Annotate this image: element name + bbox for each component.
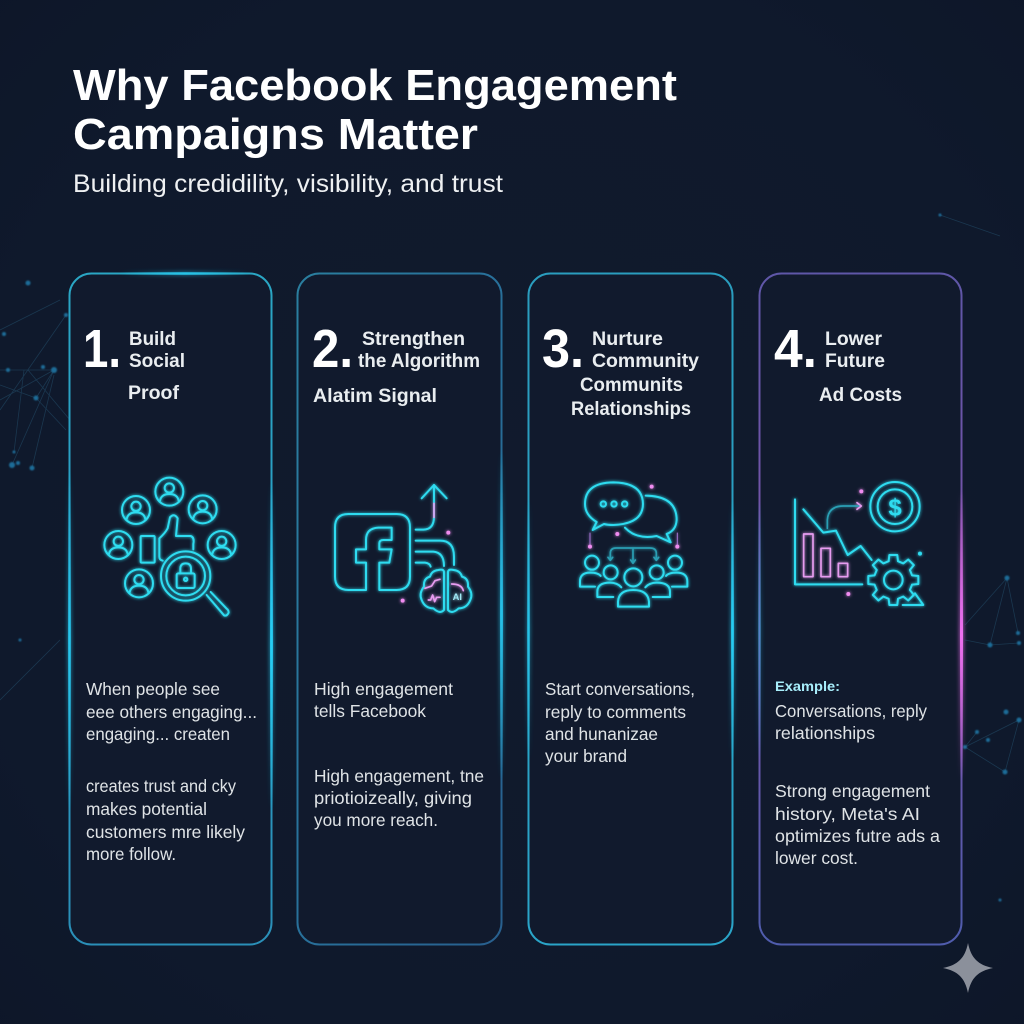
heading: strengthen the algorithm [312, 319, 480, 407]
title [73, 61, 677, 159]
heading: lower future ad costs [774, 319, 902, 406]
body text: build social proof: makes potential [86, 799, 207, 819]
icon: four-point sparkle [943, 943, 993, 993]
body text: lower future ad costs: Conversations, reply [775, 701, 927, 721]
heading: build social proof: Proof [128, 383, 180, 404]
heading: strengthen the algorithm: 2. [312, 319, 353, 379]
body text: build social proof: When people see [86, 679, 220, 699]
heading: lower future ad costs: Ad Costs [819, 385, 902, 406]
heading: build social proof: 1. [83, 319, 121, 379]
body text: lower future ad costs [775, 678, 940, 868]
heading: nurture community relationships: Communits [580, 375, 683, 396]
subtitle: Building credidility, visibility, and trust [73, 170, 503, 198]
body text: build social proof: more follow. [86, 844, 176, 864]
dollar sign on coin: $ [888, 494, 902, 521]
body text: strengthen the algorithm: High engagement, tne [314, 766, 484, 786]
heading: strengthen the algorithm: Alatim Signal [313, 386, 437, 407]
heading: nurture community relationships: Community [592, 351, 699, 372]
body text: build social proof: customers mre likely [86, 822, 245, 842]
heading: strengthen the algorithm: the Algorithm [358, 351, 480, 372]
panel: strengthen the algorithm [298, 274, 503, 944]
body text: build social proof: engaging... createn [86, 724, 230, 744]
body text: nurture community relationships [545, 679, 695, 766]
title: Why Facebook Engagement [73, 61, 677, 110]
heading: build social proof: Build [129, 329, 176, 350]
panel: lower future ad costs [758, 274, 963, 944]
heading: strengthen the algorithm: Strengthen [362, 329, 465, 350]
panel: nurture community relationships [527, 274, 734, 944]
body text: lower future ad costs: lower cost. [775, 848, 858, 868]
body text: build social proof: eee others engaging... [86, 702, 257, 722]
body text: nurture community relationships: reply to comments [545, 702, 686, 722]
body text: lower future ad costs: history, Meta's AI [775, 804, 920, 824]
heading: build social proof [83, 319, 185, 404]
icon: people, thumbs up and magnifier with lock [104, 478, 236, 616]
body text: build social proof [86, 679, 257, 864]
heading: lower future ad costs: Lower [825, 329, 883, 350]
body text: build social proof: creates trust and cky [86, 776, 236, 796]
heading: nurture community relationships: Nurture [592, 329, 663, 350]
body text: strengthen the algorithm: priotioizeally, giving [314, 788, 472, 808]
background network pattern [0, 214, 1022, 902]
heading: nurture community relationships [542, 319, 699, 420]
heading: lower future ad costs: Future [825, 351, 885, 372]
AI label in brain: AI [453, 592, 462, 602]
heading: lower future ad costs: 4. [774, 319, 817, 379]
heading: nurture community relationships: Relationships [571, 399, 691, 420]
body text: nurture community relationships: Start conversations, [545, 679, 695, 699]
body text: strengthen the algorithm: High engagement [314, 679, 453, 699]
body text: strengthen the algorithm: you more reach. [314, 810, 438, 830]
body text: nurture community relationships: your brand [545, 746, 627, 766]
heading: nurture community relationships: 3. [542, 319, 584, 379]
body text: lower future ad costs: Strong engagement [775, 781, 930, 801]
body text: lower future ad costs: relationships [775, 723, 875, 743]
panel: build social proof [68, 272, 273, 944]
body text: strengthen the algorithm [314, 679, 484, 830]
body text: nurture community relationships: and hunanizae [545, 724, 658, 744]
heading: build social proof: Social [129, 351, 185, 372]
body text: lower future ad costs: optimizes futre ads a [775, 826, 940, 846]
body text: strengthen the algorithm: tells Facebook [314, 701, 426, 721]
icon: falling cost chart with coin and gear [795, 482, 923, 605]
body text: lower future ad costs: Example: [775, 678, 840, 694]
icon: facebook logo feeding AI brain with up arrow [335, 485, 471, 612]
title: Campaigns Matter [73, 110, 478, 159]
icon: chat bubbles above a group of people [580, 482, 687, 607]
